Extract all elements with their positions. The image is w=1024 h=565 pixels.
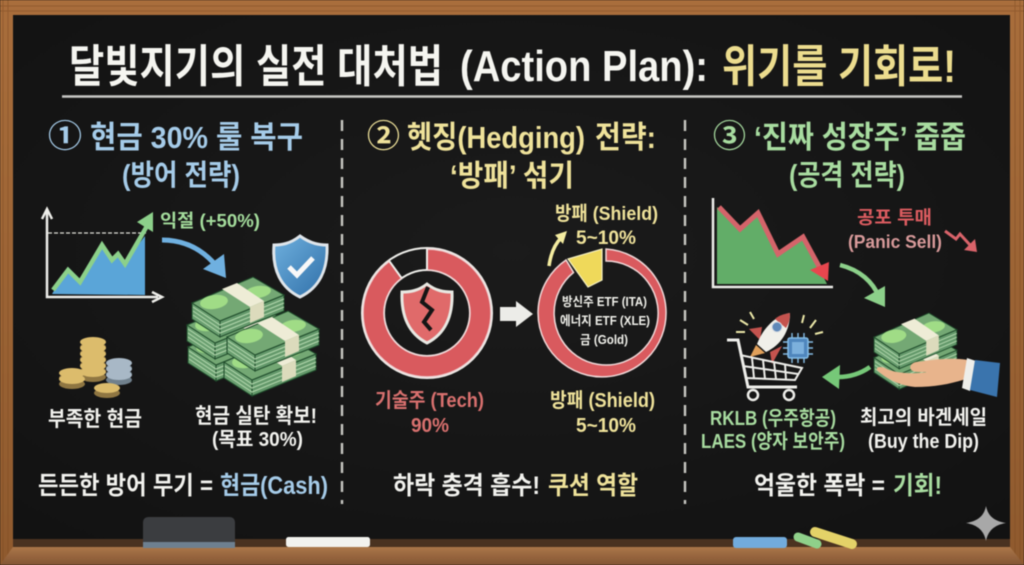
- icon: broken shield: [402, 284, 452, 343]
- blue chalk: [733, 537, 787, 548]
- donut: shield mix: [538, 249, 666, 377]
- arrow: yellow up: [549, 231, 567, 266]
- heading: hedging strategy: ‘방패’ 섞기: [450, 160, 574, 193]
- donut: tech 90 percent: [362, 248, 492, 378]
- label: take profit: 익절 (+50%): [160, 211, 260, 231]
- label: shield holdings: [560, 295, 650, 347]
- icon: sparkle: [966, 506, 1006, 541]
- heading: hedging strategy: [367, 118, 656, 193]
- label: shield holdings: 방신주 ETF (ITA): [562, 295, 647, 309]
- heading: real growth stocks: (공격 전략): [789, 159, 905, 192]
- label: shield top: 방패 (Shield): [555, 203, 658, 225]
- icon: chip: [783, 333, 813, 363]
- icon: cart with rocket and chip: [727, 312, 823, 400]
- title: 달빛지기의 실전 대처법: [69, 41, 443, 92]
- heading: cash 30 percent: 현금 30% 룰 복구: [90, 120, 303, 155]
- icon: cash stacks: [187, 277, 319, 396]
- heading: hedging strategy: ②: [367, 118, 400, 154]
- eraser: [143, 517, 235, 548]
- arrow: profit to cash: [162, 240, 226, 278]
- label: shield bottom: [550, 389, 655, 437]
- panel: growth stocks: [701, 118, 1000, 500]
- heading: cash 30 percent: [48, 118, 303, 192]
- arrow: white right: [500, 301, 533, 327]
- label: panic sell: [848, 207, 942, 252]
- heading: cash 30 percent: ①: [48, 118, 82, 154]
- label: bargain sale: [860, 406, 987, 453]
- takeaway: cushion: 하락 충격 흡수!: [393, 472, 540, 500]
- arrow: green to cart: [822, 365, 870, 389]
- title: (Action Plan):: [460, 42, 708, 91]
- label: bargain sale: 최고의 바겐세일: [860, 406, 987, 429]
- panel: cash recovery: [38, 118, 328, 500]
- chart: rising profit: [42, 209, 162, 302]
- icon: shield check: [274, 236, 327, 297]
- takeaway: defense: 현금(Cash): [220, 472, 328, 500]
- arrow: green to cash: [840, 265, 885, 307]
- takeaway: cushion: 쿠션 역할: [548, 472, 638, 500]
- title: [62, 41, 962, 96]
- heading: real growth stocks: ‘진짜 성장주’ 줍줍: [754, 120, 966, 155]
- label: stock picks: RKLB (우주항공): [710, 407, 836, 430]
- chart: falling: [713, 198, 833, 287]
- label: shield top: 5~10%: [576, 227, 636, 249]
- heading: hedging strategy: 헷징(Hedging): [407, 120, 585, 155]
- white chalk: [286, 537, 370, 547]
- label: stock picks: [701, 407, 845, 453]
- label: tech 90: 기술주 (Tech): [375, 389, 484, 412]
- icon: rocket: [749, 313, 790, 364]
- green chalk: [798, 537, 817, 544]
- takeaway: defense: [38, 472, 328, 500]
- takeaway: defense: 든든한 방어 무기 =: [38, 472, 213, 500]
- label: secure cash: (목표 30%): [212, 429, 303, 451]
- panel: hedging: [362, 118, 666, 500]
- label: stock picks: LAES (양자 보안주): [701, 430, 845, 453]
- takeaway: opportunity: 억울한 폭락 =: [754, 472, 885, 500]
- label: panic sell: (Panic Sell): [848, 231, 942, 252]
- takeaway: cushion: [393, 472, 638, 500]
- takeaway: opportunity: 기회!: [893, 472, 942, 500]
- heading: real growth stocks: [713, 118, 966, 192]
- heading: hedging strategy: 전략:: [595, 120, 656, 155]
- icon: hand: [877, 358, 1000, 397]
- label: shield top: [555, 203, 658, 249]
- heading: cash 30 percent: (방어 전략): [122, 159, 240, 192]
- label: insufficient cash: 부족한 현금: [48, 408, 142, 431]
- icon: coins: [59, 337, 132, 398]
- label: secure cash: [195, 405, 317, 451]
- title: 위기를 기회로!: [722, 41, 956, 92]
- label: shield bottom: 5~10%: [576, 415, 636, 437]
- label: secure cash: 현금 실탄 확보!: [195, 405, 317, 428]
- label: tech 90: 90%: [411, 415, 449, 437]
- icon: cash in hand: [874, 313, 1000, 397]
- label: bargain sale: (Buy the Dip): [868, 431, 979, 453]
- yellow chalk: [815, 532, 852, 544]
- label: shield holdings: 금 (Gold): [580, 333, 628, 347]
- label: panic sell: 공포 투매: [857, 207, 932, 228]
- icon: small falling arrow: [945, 231, 977, 252]
- label: tech 90: [375, 389, 484, 437]
- label: shield bottom: 방패 (Shield): [550, 389, 655, 412]
- heading: real growth stocks: ③: [713, 118, 746, 154]
- label: shield holdings: 에너지 ETF (XLE): [560, 314, 650, 328]
